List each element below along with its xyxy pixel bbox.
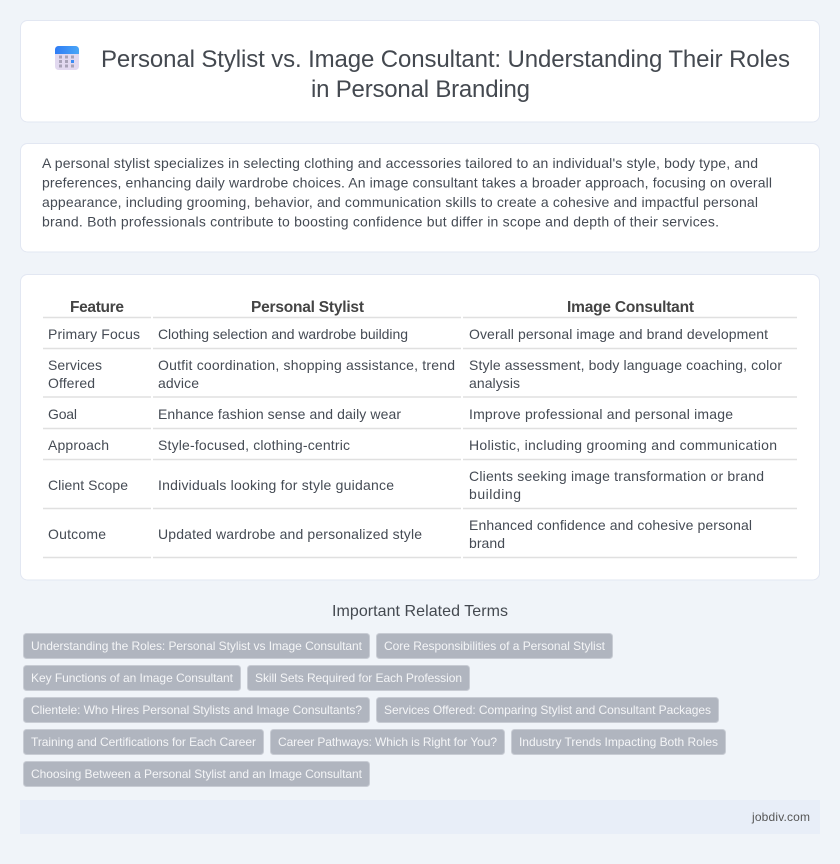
table row: primary focus: Clothing selection and wardrobe building (158, 326, 408, 342)
text block: introduction paragraph: preferences, enhancing daily wardrobe choices. An image consultant takes a broader approach, focusing on overall (42, 174, 772, 190)
icon: calendar (55, 46, 79, 70)
table row: outcome: Outcome (48, 526, 106, 542)
table row: approach: Style-focused, clothing-centric (158, 437, 350, 453)
tag (512, 730, 726, 754)
tag: Skill Sets Required for Each Profession (255, 671, 462, 685)
tag (270, 730, 504, 754)
table row: primary focus (48, 326, 768, 342)
text block: introduction paragraph (42, 155, 772, 230)
table row: client scope: Individuals looking for style guidance (158, 477, 394, 493)
table row: approach: Approach (48, 437, 109, 453)
table row: outcome (48, 517, 752, 551)
footer (20, 800, 820, 834)
table row: services offered: Outfit coordination, shopping assistance, trend (158, 357, 455, 373)
table header: Feature (70, 299, 124, 316)
table row: primary focus: Overall personal image and brand development (469, 326, 768, 342)
tag: Services Offered: Comparing Stylist and Consultant Packages (384, 703, 711, 717)
tag: Key Functions of an Image Consultant (31, 671, 234, 685)
tag: Career Pathways: Which is Right for You? (278, 735, 497, 749)
tag (376, 634, 612, 658)
panel: comparison table (20, 274, 820, 580)
table row: services offered: advice (158, 375, 199, 391)
tag list: related terms (24, 634, 726, 786)
text block: introduction paragraph: A personal stylist specializes in selecting clothing and accessories tailored to an individual's style, body type, and (42, 155, 758, 171)
tag (24, 634, 370, 658)
tag (24, 698, 370, 722)
table row: goal (48, 406, 733, 422)
table row: goal: Enhance fashion sense and daily wear (158, 406, 401, 422)
panel: title header (20, 20, 820, 122)
tag (24, 730, 264, 754)
text block: introduction paragraph: appearance, including grooming, behavior, and communication skills to create a cohesive and impactful personal (42, 194, 758, 210)
title (101, 46, 790, 103)
table row: outcome: Enhanced confidence and cohesive personal (469, 517, 752, 533)
tag: Choosing Between a Personal Stylist and an Image Consultant (31, 767, 363, 781)
tag: Understanding the Roles: Personal Stylist vs Image Consultant (31, 639, 363, 653)
tag (248, 666, 470, 690)
tag: Training and Certifications for Each Career (31, 735, 256, 749)
table header (70, 299, 694, 316)
table header: Image Consultant (567, 299, 694, 316)
table row: goal: Improve professional and personal image (469, 406, 733, 422)
table row: client scope (48, 468, 764, 502)
text block: introduction paragraph: brand. Both professionals contribute to boosting confidence but differ in scope and depth of their services. (42, 214, 719, 230)
heading: important related terms: Important Related Terms (332, 603, 508, 620)
tag (24, 762, 370, 786)
panel: introduction (20, 144, 820, 252)
tag: Industry Trends Impacting Both Roles (519, 735, 718, 749)
table row: services offered: Services (48, 357, 102, 373)
tag: Core Responsibilities of a Personal Stylist (384, 639, 606, 653)
title: Personal Stylist vs. Image Consultant: Understanding Their Roles (101, 46, 790, 73)
table row: services offered (48, 357, 782, 391)
table row: client scope: building (469, 486, 521, 502)
table row: services offered: Offered (48, 375, 95, 391)
table row: approach: Holistic, including grooming and communication (469, 437, 777, 453)
table row: client scope: Clients seeking image transformation or brand (469, 468, 764, 484)
table row: services offered: Style assessment, body language coaching, color (469, 357, 782, 373)
table row: goal: Goal (48, 406, 77, 422)
tag (376, 698, 718, 722)
table row: approach (48, 437, 777, 453)
table row: services offered: analysis (469, 375, 520, 391)
table row: client scope: Client Scope (48, 477, 128, 493)
table header: Personal Stylist (251, 299, 364, 316)
table row: outcome: Updated wardrobe and personalized style (158, 526, 422, 542)
table row: outcome: brand (469, 535, 505, 551)
title: in Personal Branding (311, 76, 530, 103)
table row: primary focus: Primary Focus (48, 326, 140, 342)
footer: jobdiv.com (751, 810, 810, 824)
tag (24, 666, 240, 690)
tag: Clientele: Who Hires Personal Stylists and Image Consultants? (31, 703, 362, 717)
